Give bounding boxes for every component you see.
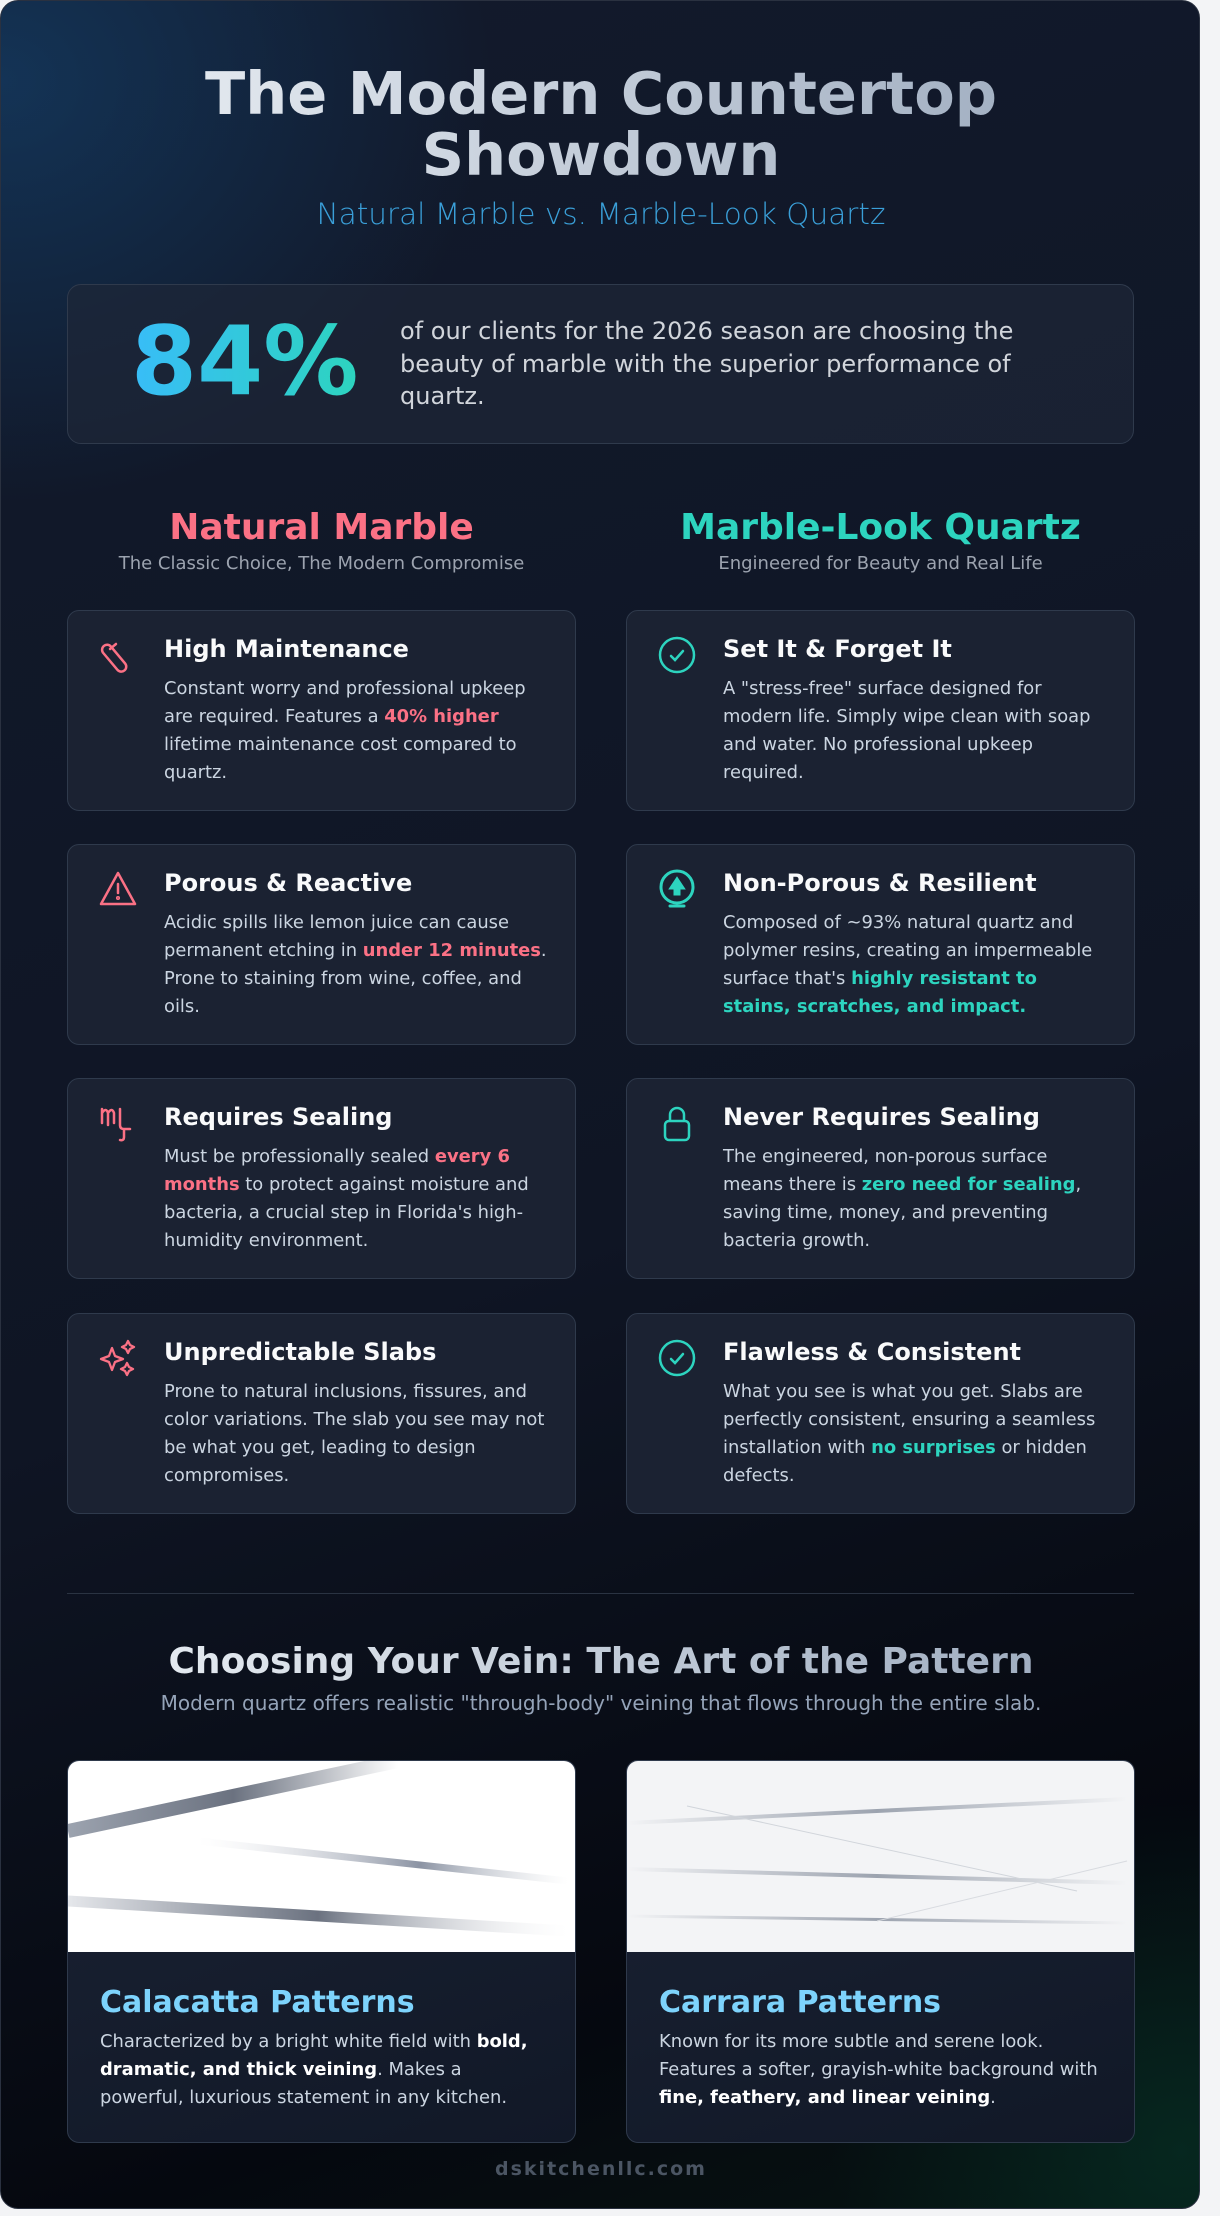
column header: natural marble	[118, 507, 524, 574]
section subtitle: Modern quartz offers realistic "through-body" veining that flows through the entire slab.	[161, 1691, 1041, 1715]
title	[1, 63, 1201, 185]
icon: shield	[660, 870, 694, 908]
panel: set it & forget it: required.	[723, 762, 804, 783]
panel: set it & forget it	[626, 610, 1135, 811]
stat text: quartz.	[400, 382, 485, 410]
column header: natural marble: The Classic Choice, The Modern Compromise	[119, 553, 524, 574]
panel: porous & reactive: oils.	[164, 996, 200, 1017]
icon: sealing	[100, 1108, 132, 1142]
icon: lock	[664, 1106, 690, 1142]
panel: non-porous: Non-Porous & Resilient	[723, 869, 1037, 897]
panel: flawless & consistent: installation with no surprises or hidden	[723, 1437, 1087, 1458]
panel: flawless & consistent: What you see is what you get. Slabs are	[723, 1381, 1083, 1402]
icon: wrench	[100, 642, 128, 673]
panel: non-porous: stains, scratches, and impact.	[723, 996, 1026, 1017]
icon: check circle	[658, 1340, 696, 1376]
panel: never requires sealing: bacteria growth.	[723, 1230, 870, 1251]
column header: quartz: Engineered for Beauty and Real Life	[718, 553, 1043, 574]
panel: porous & reactive: Porous & Reactive	[164, 869, 412, 897]
big number: 84%	[131, 307, 358, 417]
icon: warning triangle	[100, 872, 136, 906]
panel: flawless & consistent: defects.	[723, 1465, 795, 1486]
panel: non-porous: Composed of ~93% natural quartz and	[723, 912, 1073, 933]
panel: unpredictable slabs: be what you get, leading to design	[164, 1437, 476, 1458]
panel: carrara: Known for its more subtle and serene look.	[659, 2031, 1043, 2052]
icon: check circle	[658, 636, 696, 674]
carrara swatch	[627, 1761, 1134, 1952]
panel: requires sealing: humidity environment.	[164, 1230, 368, 1251]
panel: requires sealing: months to protect against moisture and	[164, 1174, 529, 1195]
panel: non-porous: surface that's highly resistant to	[723, 968, 1037, 989]
panel: calacatta	[67, 1760, 576, 2143]
panel: set it & forget it: and water. No professional upkeep	[723, 734, 1033, 755]
panel: calacatta: dramatic, and thick veining. Makes a	[100, 2059, 462, 2080]
stat text	[400, 317, 1013, 410]
panel: carrara: fine, feathery, and linear veining.	[659, 2087, 996, 2108]
panel: never requires sealing: saving time, money, and preventing	[723, 1202, 1048, 1223]
panel: calacatta: Calacatta Patterns	[100, 1985, 415, 2020]
title: The Modern Countertop	[205, 59, 997, 128]
panel: flawless & consistent: Flawless & Consistent	[723, 1338, 1021, 1366]
panel: calacatta: Characterized by a bright white field with bold,	[100, 2031, 528, 2052]
title: Showdown	[422, 120, 780, 189]
panel: unpredictable slabs: Unpredictable Slabs	[164, 1338, 436, 1366]
panel: never requires sealing: Never Requires Sealing	[723, 1103, 1040, 1131]
stat callout	[67, 284, 1134, 444]
panel: unpredictable slabs	[67, 1313, 576, 1514]
panel: non-porous	[626, 844, 1135, 1045]
panel: high maintenance: quartz.	[164, 762, 227, 783]
panel: high maintenance	[67, 610, 576, 811]
panel: requires sealing: Must be professionally sealed every 6	[164, 1146, 510, 1167]
panel: carrara: Carrara Patterns	[659, 1985, 941, 2020]
panel: calacatta: powerful, luxurious statement in any kitchen.	[100, 2087, 507, 2108]
panel: never requires sealing: means there is zero need for sealing,	[723, 1174, 1081, 1195]
panel: carrara	[626, 1760, 1135, 2143]
calacatta swatch	[68, 1761, 575, 1952]
panel: set it & forget it: A "stress-free" surface designed for	[723, 678, 1042, 699]
stat text: beauty of marble with the superior performance of	[400, 350, 1011, 378]
subtitle: Natural Marble vs. Marble-Look Quartz	[317, 197, 885, 231]
panel: porous & reactive	[67, 844, 576, 1045]
footer: dskitchenllc.com	[495, 2158, 707, 2180]
panel: requires sealing: bacteria, a crucial step in Florida's high-	[164, 1202, 523, 1223]
panel: set it & forget it: modern life. Simply wipe clean with soap	[723, 706, 1090, 727]
panel: flawless & consistent: perfectly consistent, ensuring a seamless	[723, 1409, 1095, 1430]
column header: quartz: Marble-Look Quartz	[680, 507, 1081, 548]
column header: quartz	[680, 507, 1081, 574]
panel: never requires sealing	[626, 1078, 1135, 1279]
panel: high maintenance: are required. Features a 40% higher	[164, 706, 499, 727]
column header: natural marble: Natural Marble	[169, 507, 474, 548]
panel: carrara: Features a softer, grayish-white background with	[659, 2059, 1098, 2080]
panel: flawless & consistent	[626, 1313, 1135, 1514]
panel: porous & reactive: Acidic spills like lemon juice can cause	[164, 912, 509, 933]
panel: high maintenance: Constant worry and professional upkeep	[164, 678, 526, 699]
panel: high maintenance: lifetime maintenance cost compared to	[164, 734, 517, 755]
panel: unpredictable slabs: compromises.	[164, 1465, 289, 1486]
panel: requires sealing: Requires Sealing	[164, 1103, 392, 1131]
stat text: of our clients for the 2026 season are choosing the	[400, 317, 1013, 345]
panel: non-porous: polymer resins, creating an impermeable	[723, 940, 1092, 961]
panel: porous & reactive: permanent etching in under 12 minutes.	[164, 940, 547, 961]
icon: sparkles	[100, 1340, 136, 1376]
panel: high maintenance: High Maintenance	[164, 635, 409, 663]
panel: unpredictable slabs: color variations. The slab you see may not	[164, 1409, 544, 1430]
panel: unpredictable slabs: Prone to natural inclusions, fissures, and	[164, 1381, 527, 1402]
section heading: Choosing Your Vein: The Art of the Pattern	[169, 1641, 1033, 1682]
panel: porous & reactive: Prone to staining from wine, coffee, and	[164, 968, 522, 989]
panel: requires sealing	[67, 1078, 576, 1279]
panel: never requires sealing: The engineered, non-porous surface	[723, 1146, 1047, 1167]
panel: set it & forget it: Set It & Forget It	[723, 635, 952, 663]
